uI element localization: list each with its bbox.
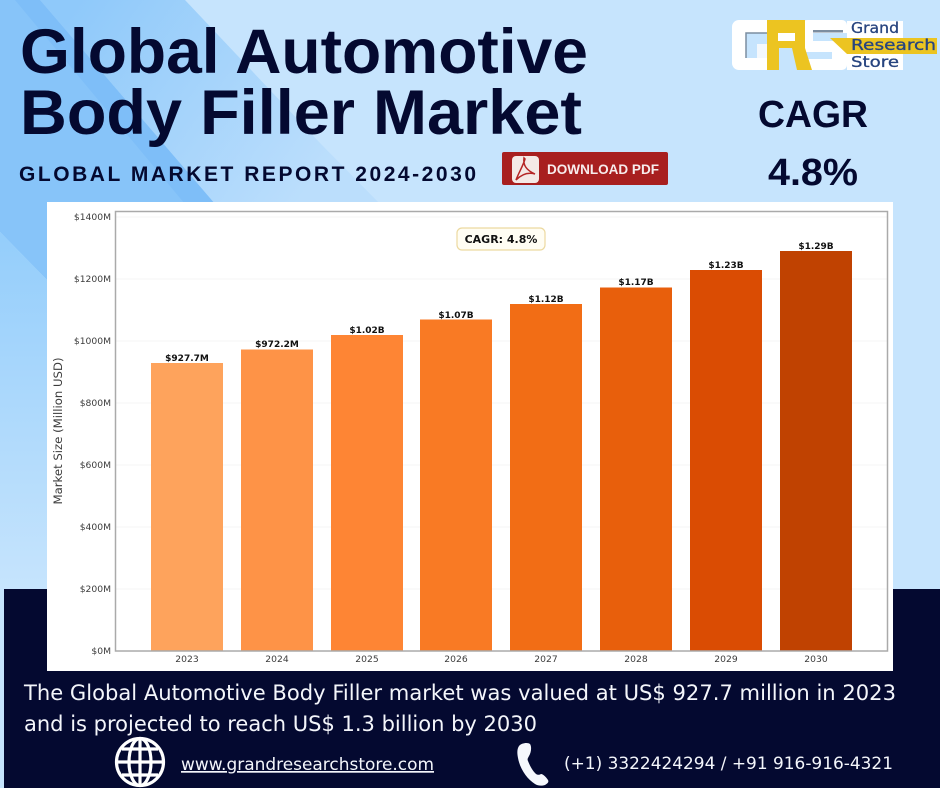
bar value labels: $1.07B (438, 311, 474, 321)
website link: www.grandresearchstore.com (181, 755, 434, 775)
y axis labels: $600M (80, 460, 111, 471)
bar value labels: $1.12B (528, 295, 564, 305)
x axis labels: 2025 (355, 654, 379, 665)
phone number: (+1) 3322424294 / +91 916-916-4321 (564, 754, 893, 774)
bar value labels (165, 242, 834, 364)
x axis labels: 2024 (265, 654, 289, 665)
icon: phone (517, 743, 548, 786)
gridlines (115, 217, 888, 589)
x axis labels: 2026 (444, 654, 468, 665)
title: Global Automotive (20, 17, 588, 87)
bar value labels: $1.17B (618, 278, 654, 288)
CAGR callout: CAGR (758, 94, 868, 136)
x axis labels (175, 654, 828, 665)
footer band (4, 589, 940, 788)
y axis labels: $200M (80, 584, 111, 595)
CAGR callout (758, 94, 868, 194)
description text: and is projected to reach US$ 1.3 billion by 2030 (24, 712, 537, 736)
bar value labels: $927.7M (165, 354, 209, 364)
icon: globe (116, 738, 164, 786)
y axis labels: $400M (80, 522, 111, 533)
icon: pdf (512, 156, 539, 183)
x axis labels: 2023 (175, 654, 199, 665)
CAGR callout: 4.8% (768, 152, 858, 194)
logo: Grand (851, 19, 899, 37)
x axis labels: 2028 (624, 654, 648, 665)
CAGR badge (457, 228, 545, 250)
bar value labels: $972.2M (255, 340, 299, 350)
plot frame (116, 212, 888, 651)
x axis labels: 2030 (804, 654, 828, 665)
description text (23, 681, 896, 736)
y axis labels: $1000M (74, 336, 111, 347)
chart panel (47, 202, 893, 671)
y axis labels: $1200M (74, 274, 111, 285)
logo mark (732, 20, 847, 70)
y axis labels (74, 212, 111, 657)
description text: The Global Automotive Body Filler market was valued at US$ 927.7 million in 2023 (23, 681, 896, 705)
y axis labels: $800M (80, 398, 111, 409)
title: Body Filler Market (20, 78, 582, 148)
y axis labels: $0M (91, 646, 111, 657)
bar value labels: $1.23B (708, 261, 744, 271)
title (20, 17, 588, 148)
logo: Store (851, 53, 899, 71)
bar value labels: $1.02B (349, 326, 385, 336)
bar value labels: $1.29B (798, 242, 834, 252)
CAGR badge: CAGR: 4.8% (465, 233, 537, 246)
download button: DOWNLOAD PDF (547, 162, 659, 177)
download button (502, 152, 668, 185)
y axis title: Market Size (Million USD) (51, 357, 65, 505)
x axis labels: 2029 (714, 654, 738, 665)
bars (151, 251, 852, 651)
y axis labels: $1400M (74, 212, 111, 223)
x axis labels: 2027 (534, 654, 558, 665)
logo: Research (851, 36, 936, 54)
logo (732, 19, 937, 71)
subtitle: GLOBAL MARKET REPORT 2024-2030 (19, 163, 476, 186)
